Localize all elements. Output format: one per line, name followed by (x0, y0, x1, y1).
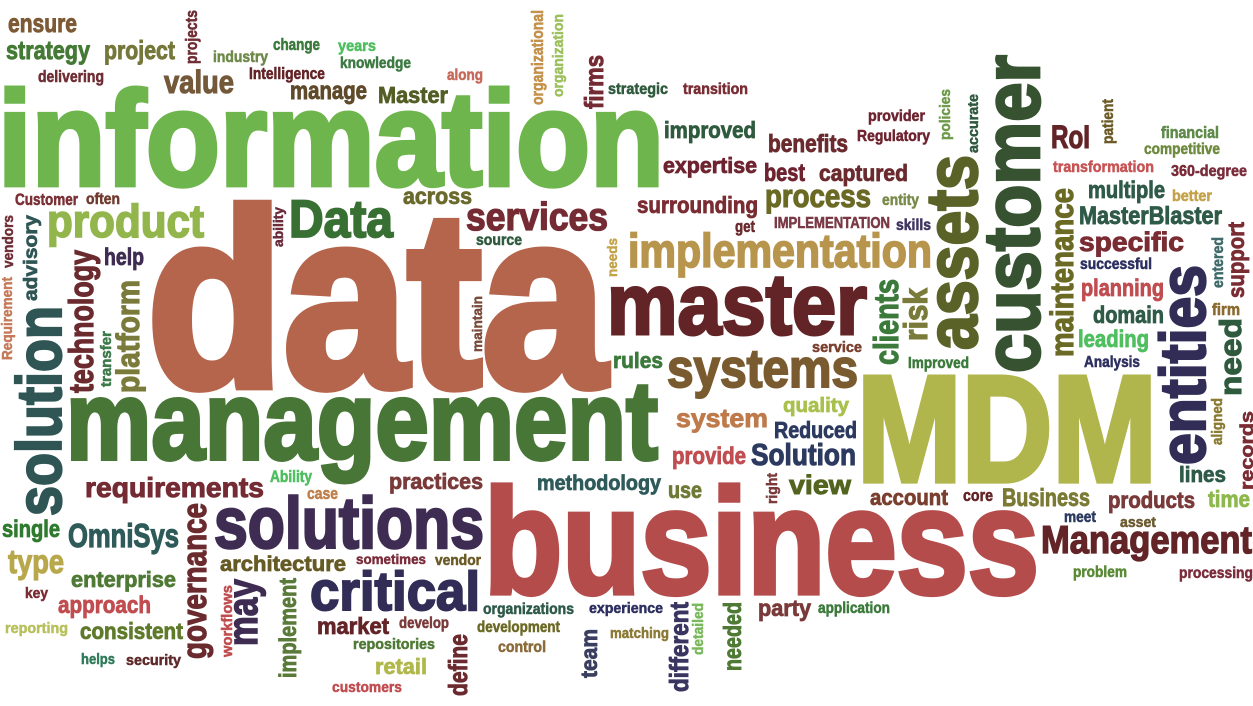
word: repositories: repositories (353, 636, 435, 653)
word: single: single (2, 516, 60, 543)
word: ensure: ensure (8, 8, 77, 38)
word: leading: leading (1078, 326, 1149, 353)
word: transition: transition (683, 81, 748, 98)
word: help: help (104, 244, 144, 271)
word: Reduced: Reduced (774, 417, 857, 443)
word: business: business (484, 458, 1039, 625)
word: surrounding: surrounding (637, 192, 758, 218)
word: management: management (66, 359, 658, 483)
word: aligned: aligned (1209, 398, 1226, 445)
word: technology: technology (63, 250, 101, 393)
word: systems: systems (667, 339, 858, 399)
word: RoI: RoI (1051, 119, 1090, 155)
word: need: need (1213, 318, 1248, 396)
word: advisory: advisory (21, 215, 42, 301)
word: Regulatory: Regulatory (857, 128, 930, 145)
word: system: system (676, 403, 768, 433)
word: knowledge: knowledge (340, 55, 411, 72)
word: products: products (1108, 487, 1195, 513)
word: develop: develop (399, 615, 449, 632)
word: customers: customers (332, 679, 402, 696)
word: quality: quality (783, 395, 850, 417)
word: Analysis: Analysis (1084, 354, 1140, 371)
word: MDM: MDM (857, 344, 1157, 513)
word: ability: ability (270, 207, 286, 247)
word: core: core (963, 486, 993, 505)
word: get: get (735, 217, 755, 236)
word: firms: firms (579, 55, 609, 109)
word: reporting: reporting (5, 620, 68, 637)
word: control: control (498, 639, 546, 656)
word: Requirement: Requirement (0, 277, 16, 360)
word: security: security (126, 652, 182, 669)
word: risk: risk (897, 287, 934, 341)
word: skills: skills (896, 217, 931, 234)
word: domain: domain (1093, 302, 1164, 329)
word: organizations: organizations (483, 601, 574, 618)
word: assets: assets (913, 155, 993, 350)
word: account: account (870, 485, 949, 510)
word: requirements: requirements (85, 472, 264, 503)
word: Data: Data (289, 190, 393, 249)
word: Customer: Customer (15, 191, 78, 209)
word: solutions: solutions (214, 484, 484, 564)
word: organization: organization (551, 14, 567, 97)
word: enterprise: enterprise (71, 567, 176, 592)
word: competitive: competitive (1144, 141, 1220, 158)
word: solution: solution (5, 306, 75, 516)
word: source: source (476, 232, 522, 249)
word: sometimes: sometimes (356, 551, 426, 567)
word: master: master (607, 257, 867, 353)
word: improved: improved (664, 117, 756, 143)
word: years: years (338, 38, 376, 55)
word: Solution: Solution (751, 437, 856, 472)
word: governance: governance (176, 503, 214, 659)
word: asset: asset (1120, 514, 1156, 531)
word: party: party (758, 595, 811, 621)
word: industry: industry (213, 49, 268, 66)
word: may: may (219, 578, 266, 646)
word: vendors: vendors (1, 215, 17, 268)
word: project: project (104, 35, 175, 65)
word: MasterBlaster: MasterBlaster (1079, 202, 1222, 230)
word: clients: clients (868, 279, 906, 365)
word: across: across (403, 183, 472, 209)
word: accurate: accurate (965, 94, 982, 153)
word: strategic: strategic (608, 81, 668, 98)
word: platform: platform (110, 280, 146, 393)
word: services: services (466, 196, 608, 239)
word: manage: manage (290, 77, 367, 105)
word: approach: approach (58, 592, 151, 619)
word: case: case (307, 484, 338, 503)
word: use: use (668, 477, 702, 503)
word: helps: helps (81, 651, 115, 668)
word: expertise: expertise (663, 153, 757, 178)
word: implementation: implementation (628, 224, 932, 277)
word: maintenance: maintenance (1044, 188, 1080, 357)
word: value: value (164, 64, 234, 100)
word: provide: provide (672, 443, 746, 470)
word: entities: entities (1147, 265, 1219, 465)
word: patient: patient (1100, 99, 1117, 144)
word: transformation: transformation (1053, 159, 1154, 176)
word: planning: planning (1081, 275, 1164, 302)
word: detailed: detailed (690, 603, 707, 655)
word: application: application (818, 600, 890, 617)
word: IMPLEMENTATION: IMPLEMENTATION (774, 215, 890, 232)
word: maintain: maintain (469, 296, 485, 352)
word: view: view (789, 470, 852, 500)
word: experience: experience (589, 600, 663, 617)
word: support: support (1223, 222, 1249, 298)
word: matching: matching (610, 625, 669, 642)
word: entered: entered (1210, 237, 1227, 288)
word: data: data (147, 160, 608, 440)
word: Master: Master (378, 82, 448, 108)
word: often: often (86, 191, 120, 208)
word: Ability: Ability (270, 467, 312, 486)
word: delivering: delivering (38, 68, 104, 86)
word: process: process (765, 178, 871, 214)
word: problem: problem (1073, 564, 1127, 581)
word: development: development (477, 619, 561, 636)
word: customer: customer (967, 55, 1056, 373)
word: financial: financial (1161, 124, 1219, 142)
word: critical: critical (310, 560, 480, 622)
word: team: team (576, 629, 602, 678)
word: define: define (443, 634, 473, 696)
word: Business: Business (1002, 484, 1090, 512)
word: consistent: consistent (80, 618, 183, 644)
word: along: along (447, 67, 483, 84)
word: multiple: multiple (1088, 177, 1165, 204)
word: retail: retail (375, 654, 427, 679)
word: information: information (0, 65, 664, 214)
word: better: better (1172, 188, 1212, 205)
word: architecture: architecture (220, 553, 346, 576)
word: Improved: Improved (908, 355, 969, 372)
word: implement: implement (275, 578, 302, 678)
word: type: type (8, 543, 64, 580)
word: different: different (664, 602, 694, 692)
word: OmniSys: OmniSys (68, 517, 179, 554)
word: change: change (273, 36, 320, 54)
word: workflows: workflows (219, 585, 236, 658)
word: service: service (812, 339, 862, 356)
word: specific: specific (1079, 227, 1184, 257)
word: practices: practices (389, 469, 483, 494)
word: needed: needed (719, 602, 747, 671)
word: entity: entity (882, 192, 919, 209)
word: needs: needs (604, 238, 620, 277)
word: vendor: vendor (435, 552, 481, 569)
word: benefits: benefits (768, 130, 848, 158)
word: right: right (764, 473, 781, 504)
word: 360-degree: 360-degree (1171, 163, 1247, 180)
word: methodology: methodology (537, 472, 661, 495)
word: rules: rules (613, 348, 663, 373)
word: captured: captured (819, 160, 908, 186)
word: successful: successful (1080, 256, 1152, 273)
word: policies: policies (937, 89, 954, 140)
word: market: market (317, 613, 389, 639)
word: best: best (764, 159, 806, 187)
word: lines: lines (1179, 462, 1226, 487)
word: transfer: transfer (98, 331, 115, 387)
word: Intelligence: Intelligence (249, 65, 325, 83)
word: key: key (25, 585, 49, 602)
word: meet: meet (1064, 509, 1097, 526)
word: firm: firm (1212, 300, 1240, 319)
word: product: product (47, 195, 204, 247)
word: provider: provider (868, 108, 925, 125)
word: strategy: strategy (6, 35, 90, 65)
